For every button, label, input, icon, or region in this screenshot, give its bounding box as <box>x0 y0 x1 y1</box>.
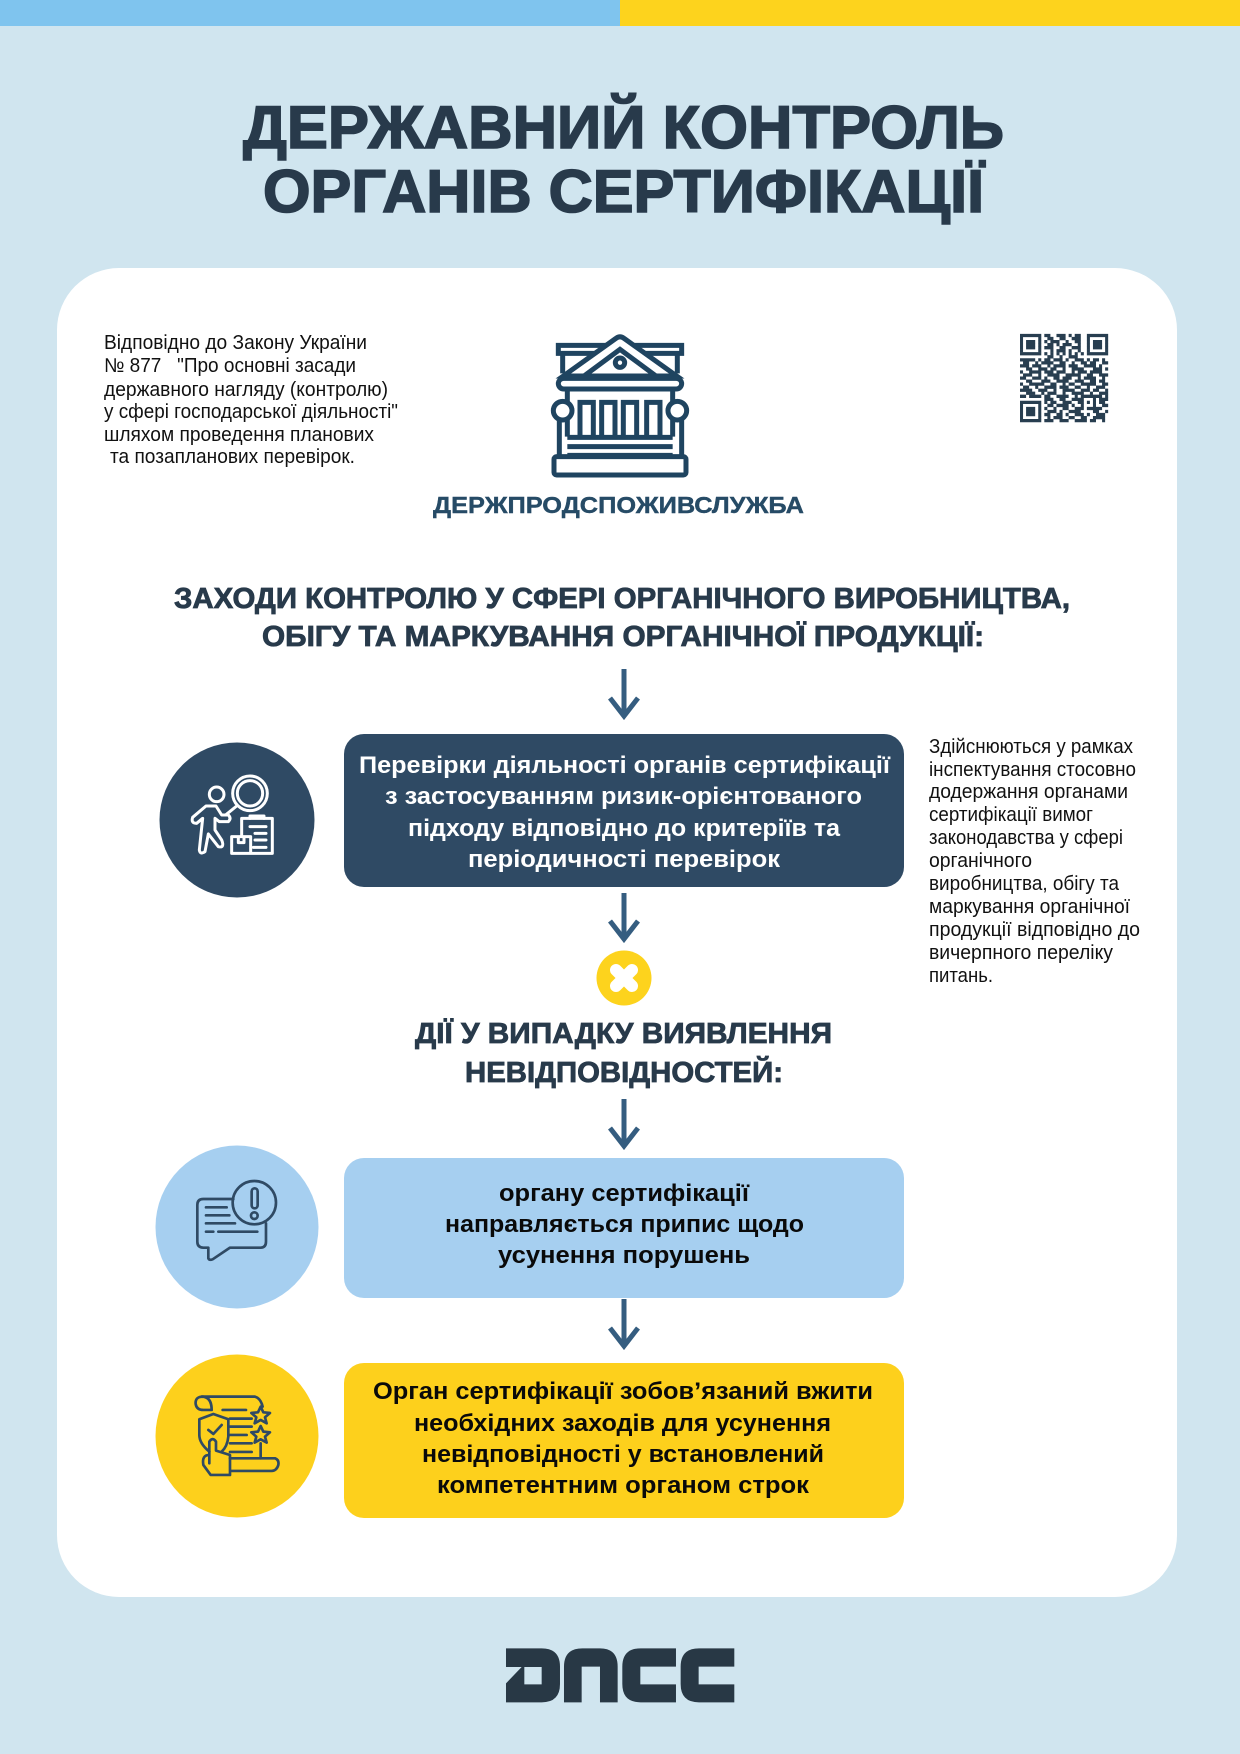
text block: side note on inspections <box>929 736 1140 987</box>
box: prescription sent to certification body: направляється припис щодо <box>445 1211 804 1238</box>
text block: side note on inspections: Здійснюються у рамках <box>929 736 1133 758</box>
text block: side note on inspections: питань. <box>929 965 993 987</box>
title <box>243 94 1004 225</box>
text block: side note on inspections: додержання органами <box>929 781 1128 803</box>
heading: actions on non-compliance: НЕВІДПОВІДНОСТЕЙ: <box>465 1055 783 1089</box>
panel: main white card <box>57 268 1177 1597</box>
box: obligation to remedy: компетентним органом строк <box>437 1472 810 1499</box>
heading: control measures: ОБІГУ ТА МАРКУВАННЯ ОРГАНІЧНОЇ ПРОДУКЦІЇ: <box>262 620 984 653</box>
text block: side note on inspections: законодавства у сфері <box>929 827 1123 849</box>
icon: government building <box>553 337 687 475</box>
box: prescription sent to certification body: усунення порушень <box>498 1242 750 1269</box>
heading: control measures <box>174 583 1070 653</box>
text block: legal basis: державного нагляду (контролю) <box>104 379 388 401</box>
arrow: heading to inspections <box>610 669 638 716</box>
text block: side note on inspections: вичерпного переліку <box>929 942 1113 964</box>
text block: legal basis: Відповідно до Закону України <box>104 332 367 354</box>
heading: control measures: ЗАХОДИ КОНТРОЛЮ У СФЕРІ ОРГАНІЧНОГО ВИРОБНИЦТВА, <box>174 583 1070 615</box>
box: inspections of certification bodies: підходу відповідно до критеріїв та <box>408 815 841 842</box>
text block: legal basis <box>104 332 398 468</box>
arrow: prescription to obligation <box>610 1299 638 1346</box>
logo: DPSS <box>506 1648 734 1702</box>
heading: actions on non-compliance <box>415 1017 832 1089</box>
title: ДЕРЖАВНИЙ КОНТРОЛЬ <box>243 94 1004 161</box>
icon: yellow cross <box>596 950 652 1006</box>
title: ОРГАНІВ СЕРТИФІКАЦІЇ <box>263 158 985 225</box>
box: obligation to remedy: необхідних заходів для усунення <box>414 1410 831 1437</box>
box: prescription sent to certification body <box>344 1158 904 1298</box>
box: obligation to remedy: невідповідності у встановлений <box>422 1441 824 1468</box>
icon: certificate circle <box>156 1354 318 1518</box>
icon: inspector circle <box>160 742 314 898</box>
text block: side note on inspections: інспектування стосовно <box>929 759 1136 781</box>
text block: side note on inspections: продукції відповідно до <box>929 919 1140 941</box>
text block: side note on inspections: виробництва, обігу та <box>929 873 1120 895</box>
arrow: heading to prescription <box>610 1099 638 1146</box>
organisation name: ДЕРЖПРОДСПОЖИВСЛУЖБА <box>433 492 804 518</box>
top colour bar <box>0 0 1240 26</box>
box: inspections of certification bodies: Перевірки діяльності органів сертифікації <box>359 752 891 779</box>
text block: legal basis: та позапланових перевірок. <box>110 446 355 468</box>
text block: legal basis: шляхом проведення планових <box>104 424 374 446</box>
box: inspections of certification bodies: періодичності перевірок <box>468 846 781 873</box>
box: obligation to remedy <box>344 1363 904 1518</box>
text block: side note on inspections: органічного <box>929 850 1032 872</box>
text block: side note on inspections: сертифікації вимог <box>929 804 1093 826</box>
box: obligation to remedy: Орган сертифікації зобов’язаний вжити <box>373 1378 873 1405</box>
box: inspections of certification bodies: з застосуванням ризик-орієнтованого <box>385 783 862 810</box>
text block: legal basis: у сфері господарської діяльності" <box>104 401 398 423</box>
QR code <box>1020 336 1108 421</box>
box: prescription sent to certification body: органу сертифікації <box>499 1180 750 1207</box>
icon: message alert circle <box>156 1146 318 1308</box>
arrow: inspections to non-compliance <box>610 893 638 939</box>
text block: side note on inspections: маркування органічної <box>929 896 1130 918</box>
heading: actions on non-compliance: ДІЇ У ВИПАДКУ ВИЯВЛЕННЯ <box>415 1017 832 1050</box>
text block: legal basis: № 877 "Про основні засади <box>104 355 356 377</box>
box: inspections of certification bodies <box>344 734 904 887</box>
